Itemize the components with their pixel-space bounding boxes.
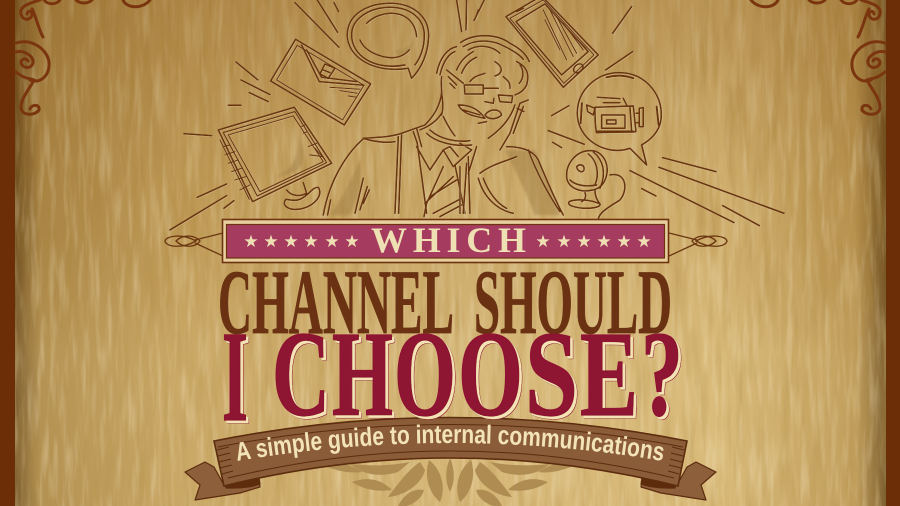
banner word: WHICH — [371, 220, 526, 260]
stars: right: ★ — [636, 232, 652, 252]
stars: right: ★ — [576, 232, 592, 252]
rays: right — [466, 0, 784, 226]
stars: left: ★ — [344, 232, 360, 252]
stars: right: ★ — [556, 232, 572, 252]
icon: speech bubble — [347, 3, 429, 78]
figure: man's left shoulder, collar and tie — [323, 82, 477, 217]
decorative flourish below ribbon — [313, 458, 585, 506]
title line: I CHOOSE? — [222, 305, 683, 449]
stars: right: ★ — [596, 232, 612, 252]
stars: right: ★ — [535, 232, 551, 252]
icon: smartphone — [506, 0, 598, 87]
stars: left: ★ — [243, 232, 259, 252]
corner ornament: top right — [751, 0, 885, 114]
illustration shading smudges — [273, 38, 560, 215]
illustration: right half (phone, video bubble, webcam, rays) — [460, 0, 784, 226]
illustration: left half (rays, speech bubble, envelope, monitor, man's shoulder) — [170, 0, 478, 230]
title line: I CHOOSE?: I — [222, 305, 248, 449]
right border bar — [886, 0, 900, 506]
banner: WHICH — [165, 220, 727, 262]
banner knots — [165, 233, 727, 256]
stars: left: ★ — [283, 232, 299, 252]
stars: right: ★ — [616, 232, 632, 252]
figure: man's right shoulder — [460, 147, 563, 215]
title line: I CHOOSE?: ? — [641, 307, 683, 442]
illustration: man's head and raised hand — [420, 36, 529, 150]
icon: webcam — [567, 151, 625, 223]
title line: I CHOOSE?: O — [458, 307, 523, 442]
left border bar — [0, 0, 15, 506]
title line: I CHOOSE?: C — [272, 307, 330, 442]
icon: video camera speech bubble — [577, 73, 661, 165]
ribbon banner: A simple guide to internal communications — [238, 424, 664, 461]
corner ornament: top left — [16, 0, 150, 114]
title line: I CHOOSE?: E — [580, 307, 638, 442]
stars: left: ★ — [263, 232, 279, 252]
title line: CHANNEL SHOULD: SHOULD — [474, 251, 672, 353]
title line: I CHOOSE?: H — [332, 307, 393, 442]
stars: left: ★ — [324, 232, 340, 252]
icon: computer monitor — [218, 107, 332, 209]
ribbon banner — [184, 416, 717, 501]
ribbon body — [214, 418, 687, 486]
title line: I CHOOSE?: S — [525, 307, 578, 442]
icon: envelope — [271, 39, 371, 125]
ribbon tail: left — [185, 462, 260, 500]
title line: I CHOOSE?: O — [394, 307, 456, 442]
title line: CHANNEL SHOULD: CHANNEL — [218, 251, 454, 353]
ribbon tail: right — [641, 462, 716, 500]
rays: left — [170, 0, 478, 230]
stars: left: ★ — [303, 232, 319, 252]
ribbon caption — [237, 443, 663, 461]
